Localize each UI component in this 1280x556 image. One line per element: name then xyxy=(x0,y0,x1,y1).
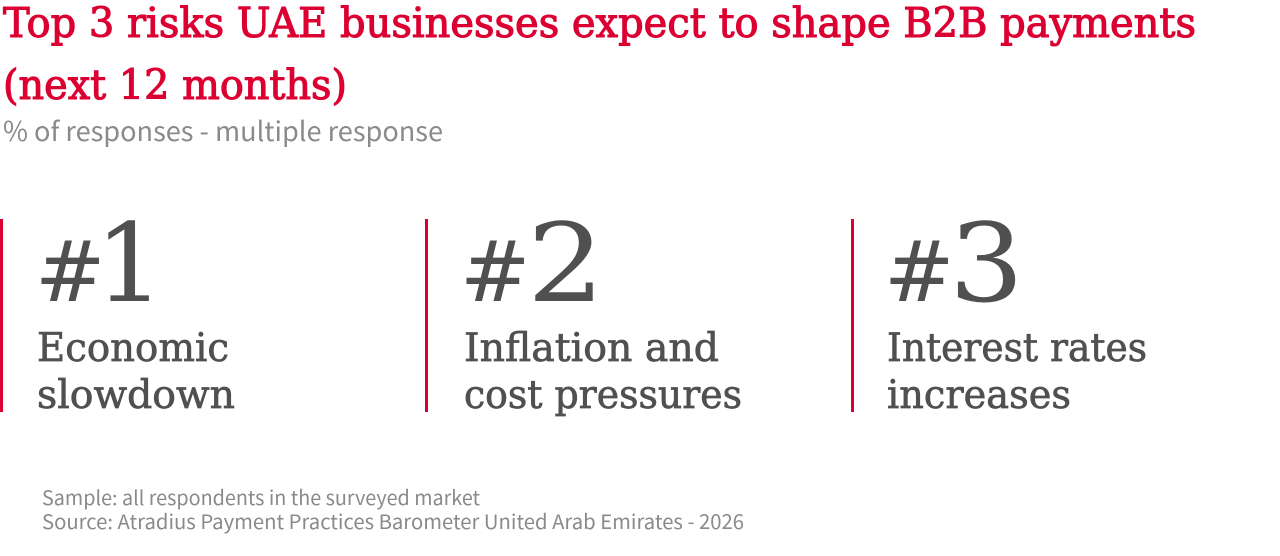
footnote: Source: Atradius Payment Practices Barometer United Arab Emirates - 2026 xyxy=(42,506,744,535)
panel: risk 3 xyxy=(851,200,1147,418)
label 3: Interest rates xyxy=(887,326,1147,371)
label 3: increases xyxy=(887,373,1071,418)
accent bar 1 xyxy=(0,219,3,412)
label 1 xyxy=(37,326,235,418)
label 1: Economic xyxy=(37,326,229,371)
label 3 xyxy=(887,326,1147,418)
title: (next 12 months) xyxy=(3,61,347,109)
accent bar 3 xyxy=(851,219,854,412)
footnote: Sample: all respondents in the surveyed market xyxy=(42,482,480,511)
label 2: Inflation and xyxy=(464,326,719,371)
rank 3 xyxy=(884,200,1024,327)
label 2 xyxy=(464,326,742,418)
footnote xyxy=(42,482,744,535)
rank 1: 1 xyxy=(95,200,164,327)
label 1: slowdown xyxy=(37,373,235,418)
rank 3: 3 xyxy=(949,200,1024,327)
rank 2: # xyxy=(460,223,530,321)
rank 1 xyxy=(35,200,164,327)
title: Top 3 risks UAE businesses expect to shape B2B payments xyxy=(3,0,1196,47)
subtitle: % of responses - multiple response xyxy=(3,110,443,149)
rank 3: # xyxy=(884,223,954,321)
label 2: cost pressures xyxy=(464,373,742,418)
accent bar 2 xyxy=(425,219,428,412)
rank 2 xyxy=(460,201,605,327)
title xyxy=(3,0,1196,109)
rank 1: # xyxy=(35,223,105,321)
rank 2: 2 xyxy=(527,201,605,327)
panel: risk 1 xyxy=(0,200,235,418)
panel: risk 2 xyxy=(425,201,742,418)
